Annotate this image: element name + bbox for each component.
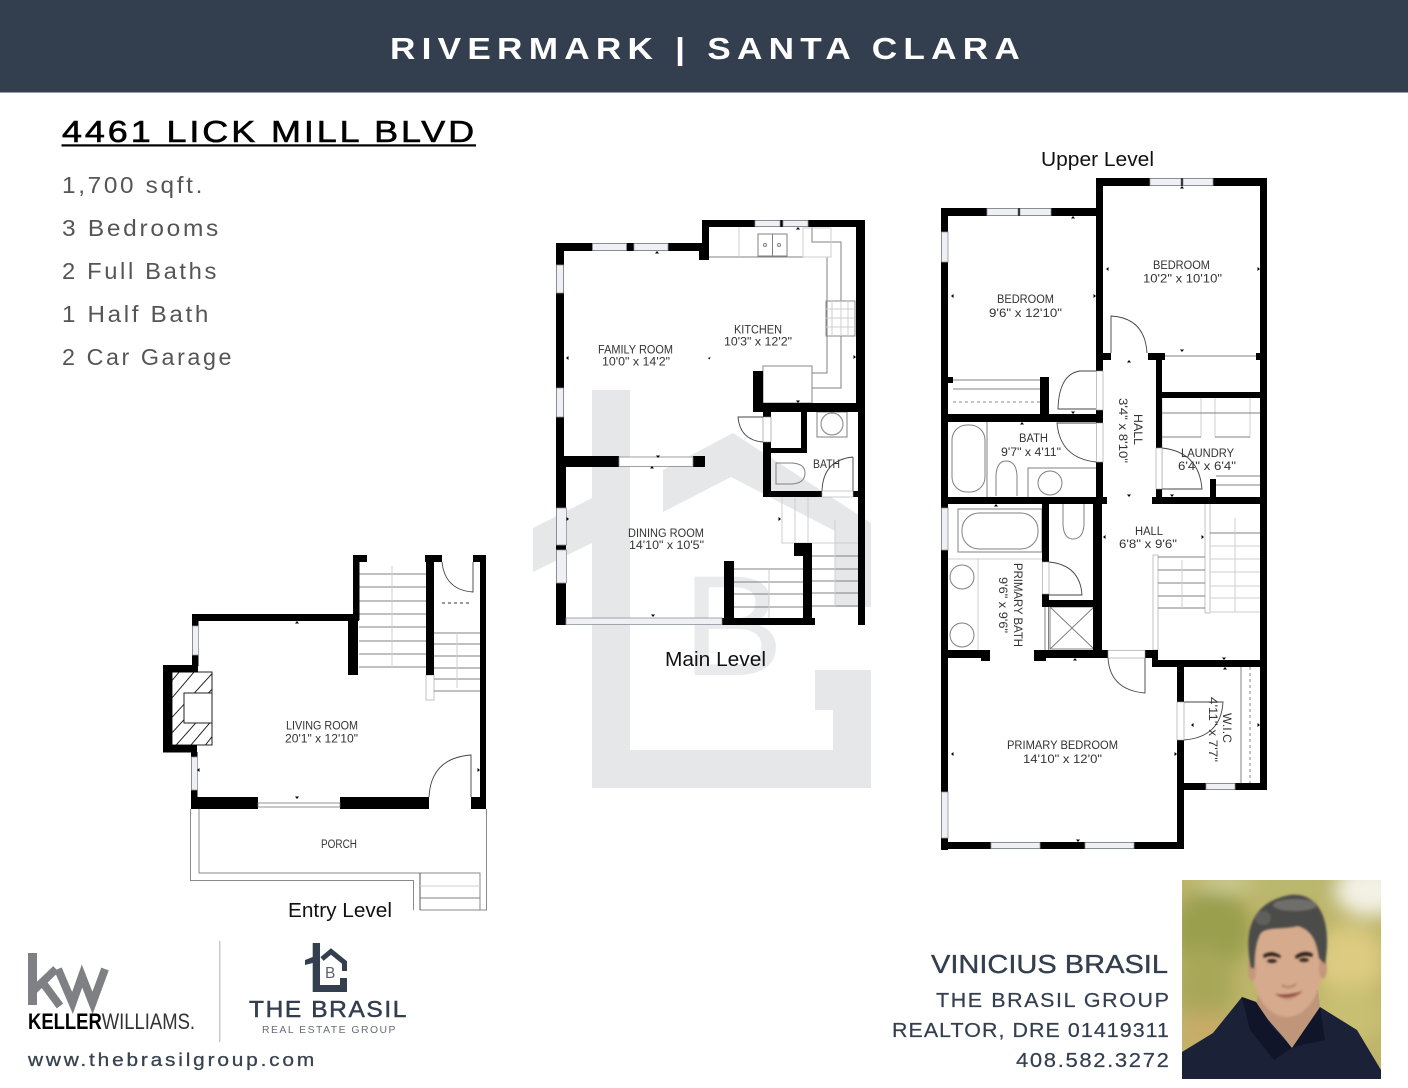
floor plan: upper level xyxy=(941,178,1267,850)
upper level room labels: PRIMARY BATH xyxy=(1011,563,1023,647)
property facts list: 2 Full Baths xyxy=(62,258,219,284)
floor plan: entry level xyxy=(160,555,486,910)
entry level stairs xyxy=(359,566,480,700)
upper level dimension ticks xyxy=(951,186,1260,842)
house monogram xyxy=(305,943,347,992)
upper level room labels: LAUNDRY xyxy=(1181,448,1234,460)
upper level fixtures xyxy=(948,380,1260,783)
shirt xyxy=(1182,997,1381,1079)
main level room labels: 10'0" x 14'2" xyxy=(602,356,670,368)
upper level room labels: 9'7" x 4'11" xyxy=(1001,447,1061,459)
main level room labels: 10'3" x 12'2" xyxy=(724,336,792,348)
property facts list xyxy=(62,172,234,370)
entry level room labels: 20'1" x 12'10" xyxy=(285,734,358,746)
agent contact details xyxy=(892,949,1170,1072)
upper level room labels: 9'6" x 9'6" xyxy=(996,577,1008,633)
agent company: THE BRASIL GROUP xyxy=(936,990,1170,1012)
face xyxy=(1248,915,1327,1017)
upper level room labels: 14'10" x 12'0" xyxy=(1023,754,1102,766)
property facts list: 3 Bedrooms xyxy=(62,215,221,241)
upper level room labels: 6'8" x 9'6" xyxy=(1119,539,1177,551)
upper level room labels: BEDROOM xyxy=(997,294,1054,306)
agent portrait illustration xyxy=(1182,880,1381,1079)
property facts list: 1 Half Bath xyxy=(62,301,211,327)
upper level windows and doors xyxy=(942,178,1256,848)
blurred foliage background xyxy=(1182,880,1381,1040)
main level room labels: FAMILY ROOM xyxy=(598,344,673,356)
main level room labels xyxy=(598,324,840,552)
upper level stairs xyxy=(1153,503,1260,650)
watermark logo: B xyxy=(682,547,784,706)
property facts list: 1,700 sqft. xyxy=(62,172,205,198)
label: upper level: Upper Level xyxy=(1041,149,1154,171)
main level stairs xyxy=(734,497,858,618)
agent phone: 408.582.3272 xyxy=(1016,1050,1170,1072)
upper level room labels: W.I.C xyxy=(1220,713,1232,743)
upper level room labels: 9'6" x 12'10" xyxy=(989,308,1062,320)
fireplace xyxy=(172,672,212,746)
entry level windows and doors xyxy=(192,562,473,807)
website: www.thebrasilgroup.com xyxy=(27,1049,317,1070)
polo collar xyxy=(1242,997,1325,1060)
upper level room labels xyxy=(989,260,1236,766)
banner title: RIVERMARK | SANTA CLARA xyxy=(390,31,1026,66)
label: main level: Main Level xyxy=(665,649,766,671)
house monogram: B xyxy=(325,965,335,982)
Keller Williams wordmark: KELLERWILLIAMS. xyxy=(28,1009,195,1034)
kw monogram xyxy=(28,953,105,1006)
porch outline xyxy=(190,809,486,910)
upper level room labels: HALL xyxy=(1131,414,1143,446)
upper level room labels: 10'2" x 10'10" xyxy=(1143,274,1222,286)
entry level room labels xyxy=(285,720,358,851)
logo: Keller Williams xyxy=(28,953,195,1034)
upper level room labels: HALL xyxy=(1135,526,1164,538)
entry level room labels: PORCH xyxy=(321,839,357,851)
main level room labels: BATH xyxy=(813,459,840,471)
main level room labels: DINING ROOM xyxy=(628,528,704,540)
watermark logo xyxy=(533,390,871,788)
upper level room labels: 6'4" x 6'4" xyxy=(1178,461,1236,473)
upper level room labels: BATH xyxy=(1019,433,1048,445)
entry level dimension ticks xyxy=(197,621,480,799)
agent license: REALTOR, DRE 01419311 xyxy=(892,1020,1170,1042)
header banner xyxy=(0,0,1408,92)
agent name: VINICIUS BRASIL xyxy=(931,949,1168,979)
main level walls xyxy=(556,220,865,625)
upper level room labels: PRIMARY BEDROOM xyxy=(1007,740,1118,752)
property facts list: 2 Car Garage xyxy=(62,344,234,370)
upper level room labels: 4'11" x 7'7" xyxy=(1206,697,1218,762)
property address heading: 4461 LICK MILL BLVD xyxy=(62,114,477,149)
upper level walls xyxy=(941,178,1267,850)
main level room labels: 14'10" x 10'5" xyxy=(629,540,704,552)
hair xyxy=(1248,895,1327,968)
neck xyxy=(1256,990,1320,1047)
half bath fixtures xyxy=(776,412,853,491)
brand tagline: REAL ESTATE GROUP xyxy=(262,1024,397,1036)
kitchen fixtures xyxy=(709,227,855,403)
brand name: THE BRASIL xyxy=(249,996,408,1022)
logo divider xyxy=(219,941,220,1042)
upper level room labels: BEDROOM xyxy=(1153,260,1210,272)
logo: The Brasil Real Estate Group xyxy=(249,943,408,1036)
main level dimension ticks xyxy=(566,227,856,617)
upper level room labels: 3'4" x 8'10" xyxy=(1116,398,1128,463)
main level room labels: KITCHEN xyxy=(734,324,782,336)
entry level room labels: LIVING ROOM xyxy=(286,720,358,732)
entry level walls xyxy=(163,555,486,809)
main level windows and doors xyxy=(556,220,853,624)
label: entry level: Entry Level xyxy=(288,900,392,922)
facial features xyxy=(1263,952,1313,999)
floor plan: main level xyxy=(556,220,865,625)
